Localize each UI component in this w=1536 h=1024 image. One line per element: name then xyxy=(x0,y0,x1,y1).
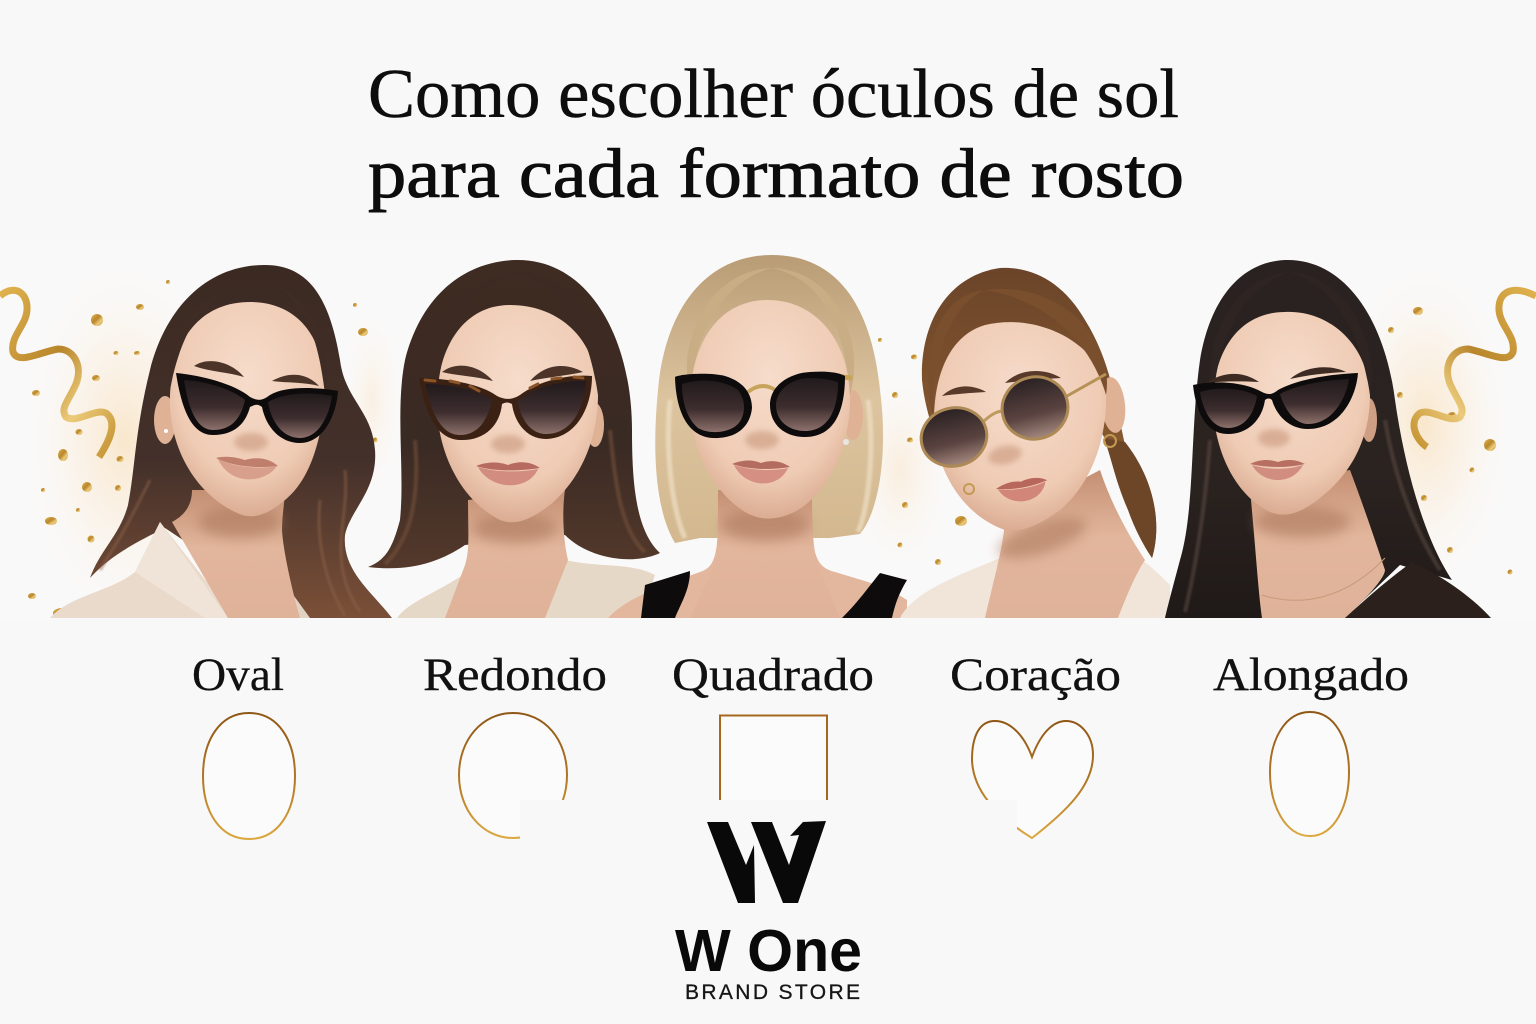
icon: square shape xyxy=(720,716,827,826)
ribbon right xyxy=(1414,290,1536,447)
portrait: coração xyxy=(900,268,1170,618)
icon: long shape xyxy=(1270,712,1349,836)
ribbon left xyxy=(0,290,112,457)
icon: round shape xyxy=(459,713,567,838)
portrait: redondo xyxy=(368,260,660,618)
portrait: quadrado xyxy=(608,255,907,618)
background glow and confetti xyxy=(25,265,1512,618)
logo xyxy=(675,821,862,1004)
icon: oval shape xyxy=(203,713,295,839)
label: oval: Oval xyxy=(192,649,284,701)
label: alongado: Alongado xyxy=(1213,649,1409,701)
label: redondo: Redondo xyxy=(423,649,607,701)
portrait: oval xyxy=(50,265,392,618)
lower background xyxy=(0,619,1536,1024)
logo backdrop patch xyxy=(520,800,1017,1024)
title: Como escolher óculos de sol xyxy=(368,56,1179,133)
label: quadrado: Quadrado xyxy=(672,649,874,701)
title xyxy=(368,56,1184,213)
logo wordmark: W One xyxy=(675,918,862,984)
logo tagline: BRAND STORE xyxy=(685,981,860,1004)
label: coração: Coração xyxy=(950,649,1121,701)
title: para cada formato de rosto xyxy=(368,136,1184,213)
logo mark xyxy=(707,821,826,903)
icon: heart shape xyxy=(972,721,1093,838)
portrait: alongado xyxy=(1165,260,1491,618)
